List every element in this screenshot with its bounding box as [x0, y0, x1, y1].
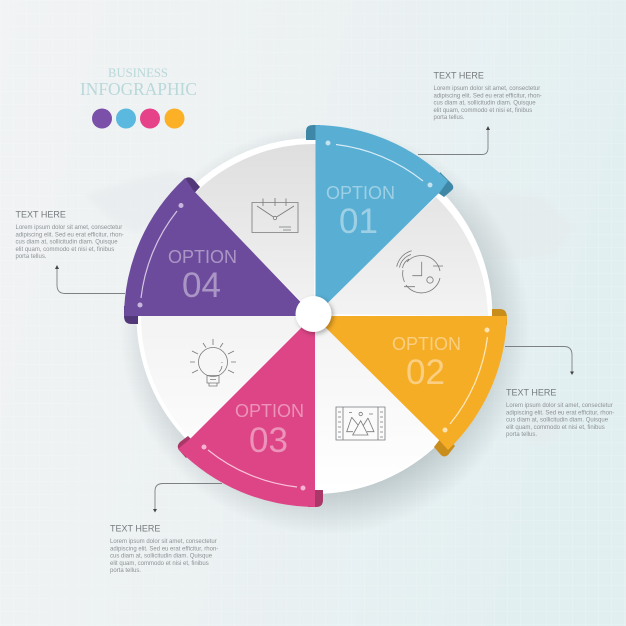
text block: option 04: porta tellus. — [16, 254, 47, 260]
text block: option 02: adipiscing elit. Sed eu erat efficitur, rhon- — [506, 410, 614, 416]
text block: option 01: TEXT HERE — [434, 70, 484, 80]
text block: option 01: Lorem ipsum dolor sit amet, consectetur — [434, 86, 540, 92]
circle shadow — [120, 125, 530, 535]
text block: option 03 — [110, 524, 218, 574]
grey sector: bulb — [141, 314, 314, 438]
text block: option 01: porta tellus. — [434, 115, 465, 121]
panel: option 01 — [316, 125, 448, 315]
text block: option 01: cus diam at, sollicitudin diam. Quisque — [434, 101, 536, 107]
pie chart — [124, 125, 507, 507]
text block: option 03: porta tellus. — [110, 568, 141, 574]
pink fold — [178, 436, 323, 507]
text block: option 01: adipiscing elit. Sed eu erat efficitur, rhon- — [434, 93, 542, 99]
panel: option 03: 03 — [249, 421, 288, 460]
text block: option 03: TEXT HERE — [110, 524, 160, 534]
panel: option 03 — [178, 314, 315, 507]
text block: option 02: TEXT HERE — [506, 388, 556, 398]
title: INFOGRAPHIC — [80, 79, 197, 99]
text block: option 04: adipiscing elit. Sed eu erat efficitur, rhon- — [16, 232, 124, 238]
arrow: option 03 — [153, 484, 222, 512]
purple fold — [124, 177, 200, 324]
text block: option 03: elit quam, commodo et nisi et, finibus — [110, 561, 209, 567]
text block: option 01: elit quam, commodo et nisi et, finibus — [434, 108, 532, 114]
center hub — [296, 296, 332, 332]
panel: option 03: OPTION — [235, 401, 304, 421]
grey sector: clock — [314, 197, 488, 316]
text block: option 03: Lorem ipsum dolor sit amet, consectetur — [110, 539, 217, 545]
text block: option 04: TEXT HERE — [16, 210, 66, 220]
icon: clock — [397, 251, 443, 293]
title: BUSINESS — [108, 66, 168, 80]
text block: option 03: cus diam at, sollicitudin diam. Quisque — [110, 554, 213, 560]
orange fold — [434, 309, 507, 456]
white outer disc — [136, 138, 492, 494]
blue fold — [306, 125, 453, 197]
title — [80, 66, 197, 99]
arrow: option 01 — [418, 126, 490, 154]
panel: option 02: 02 — [406, 353, 445, 392]
grey sector: picture — [314, 314, 440, 490]
grey sector: envelope — [194, 144, 316, 314]
text block: option 02: cus diam at, sollicitudin diam. Quisque — [506, 418, 609, 424]
arrow: option 02 — [505, 346, 574, 375]
panel: option 01: 01 — [339, 202, 378, 241]
color dots legend — [92, 108, 184, 128]
text block: option 01 — [434, 70, 542, 121]
panel: option 04 — [124, 178, 314, 316]
text block: option 02: elit quam, commodo et nisi et, finibus — [506, 425, 605, 431]
panel: option 04: OPTION — [168, 247, 237, 267]
icon: light bulb — [190, 339, 236, 386]
icon: picture — [336, 407, 385, 440]
panel: option 01: OPTION — [326, 183, 395, 203]
panel: option 02: OPTION — [392, 334, 461, 354]
text block: option 04 — [16, 210, 124, 260]
text block: option 02 — [506, 388, 614, 438]
icon: envelope — [252, 198, 298, 232]
text block: option 02: Lorem ipsum dolor sit amet, consectetur — [506, 403, 613, 409]
text block: option 04: cus diam at, sollicitudin diam. Quisque — [16, 240, 118, 246]
arrow: option 04 — [55, 265, 125, 294]
panel: option 02 — [314, 316, 507, 450]
text block: option 04: elit quam, commodo et nisi et, finibus — [16, 247, 114, 253]
text block: option 03: adipiscing elit. Sed eu erat efficitur, rhon- — [110, 546, 218, 552]
text block: option 02: porta tellus. — [506, 432, 537, 438]
panel: option 04: 04 — [182, 266, 221, 305]
text block: option 04: Lorem ipsum dolor sit amet, consectetur — [16, 225, 122, 231]
